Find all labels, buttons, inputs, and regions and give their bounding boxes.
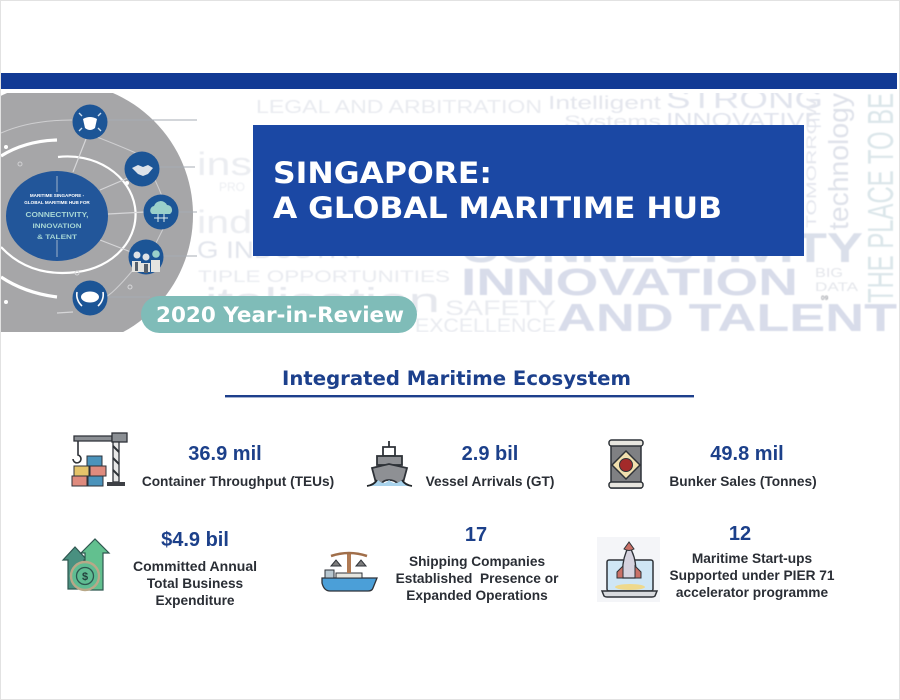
icon: rocket launching from laptop [597,537,660,602]
value: 49.8 mil [710,443,784,465]
label [133,559,257,608]
label: Bunker Sales (Tonnes) [669,474,817,489]
icon: fuel barrel [609,440,643,488]
node: singapore [72,280,108,316]
label: Total Business [147,576,244,591]
top banner bar [1,73,897,89]
word cloud background: TOMORROW [803,97,819,228]
word cloud background: CONNECTIVITY [460,224,863,271]
label: accelerator programme [676,585,828,600]
central hub circle: INNOVATION [32,223,82,230]
icon: crane and containers [72,433,127,486]
node: vessel [72,104,108,140]
value: $4.9 bil [161,529,229,551]
word cloud background: 09 [821,295,829,302]
central hub circle [6,171,108,261]
title panel: A GLOBAL MARITIME HUB [273,191,722,225]
title panel [253,125,804,256]
word cloud background: Intelligent [548,93,661,113]
icon: growth arrows with dollar coin [63,539,109,590]
stat: maritime start-ups [597,523,835,602]
word cloud background: TIPLE OPPORTUNITIES [198,267,450,286]
word cloud background: INNOVATION [461,262,798,304]
label: Established Presence or [396,571,559,586]
stat: shipping companies [322,524,559,603]
maritime singapore circular diagram [1,93,197,332]
node: handshake [124,152,160,186]
value: 17 [465,524,487,546]
stat: bunker sales [609,440,817,489]
word cloud background: technology [823,93,854,230]
word cloud background: BIG [815,265,843,280]
value: 2.9 bil [462,443,518,465]
central hub circle: MARITIME SINGAPORE - [30,193,85,198]
value: 12 [729,523,751,545]
label [669,551,835,600]
word cloud background: AND TALENT [557,297,897,340]
stat: container throughput [72,433,334,489]
icon: cargo ship with scales [322,553,377,591]
stat: vessel arrivals [367,441,554,489]
central hub circle: GLOBAL MARITIME HUB FOR [24,200,90,205]
node: cloud [144,194,178,230]
label: Vessel Arrivals (GT) [426,474,554,489]
label: Expenditure [155,593,235,608]
label: Maritime Start-ups [692,551,812,566]
word cloud background: STRONG [666,84,823,114]
title panel: SINGAPORE: [273,156,492,190]
word cloud background: LEGAL AND ARBITRATION [256,97,542,117]
central hub circle: CONNECTIVITY, [26,212,89,219]
gray disc [1,93,193,332]
word cloud background: ins [197,146,252,182]
label [396,554,559,603]
stat: business expenditure [63,529,257,608]
word cloud background [197,84,900,340]
icon: ship [367,441,412,486]
label: Expanded Operations [406,588,548,603]
label: Supported under PIER 71 [669,568,835,583]
word cloud background: PRO [219,180,245,194]
label: Shipping Companies [409,554,545,569]
value: 36.9 mil [188,443,262,465]
word cloud background: ind [197,204,252,240]
icon: growth arrows with dollar coin: $ [82,571,88,583]
year-in-review pill: 2020 Year-in-Review [156,303,404,328]
word cloud background: Systems [564,112,661,131]
label: Container Throughput (TEUs) [142,474,334,489]
node: people [128,240,164,274]
central hub circle: & TALENT [37,234,77,241]
word cloud background: SAFETY [445,297,556,320]
section heading: Integrated Maritime Ecosystem [282,367,631,390]
word cloud background: EXCELLENCE [415,316,556,337]
word cloud background: G INDUSTRY [197,237,367,264]
word cloud background: INNOVATIVE [666,110,822,132]
word cloud background: italisation [205,282,440,320]
year-in-review pill [141,296,417,333]
label: Committed Annual [133,559,257,574]
word cloud background: DATA [815,280,858,294]
